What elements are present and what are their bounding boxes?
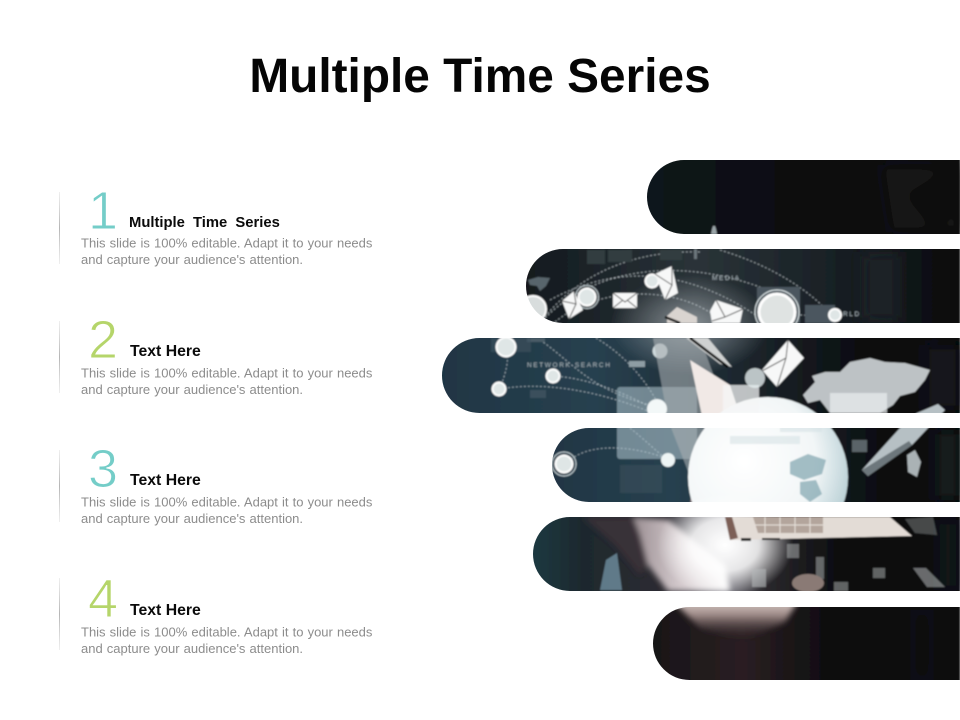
strip 2 network	[527, 249, 860, 323]
number 1: 1	[88, 181, 118, 241]
translucent data panel	[617, 387, 697, 459]
envelopes	[562, 266, 743, 323]
map Australia	[907, 450, 921, 477]
strip 2 network: RLD	[843, 311, 861, 318]
heading 1: Multiple Time Series	[129, 215, 280, 231]
description 1: and capture your audience's attention.	[81, 252, 303, 267]
central soft glow	[615, 278, 759, 370]
list item 4	[59, 569, 373, 656]
data blocks beside globe	[852, 440, 867, 452]
laptop base	[725, 517, 912, 541]
list item 3	[59, 439, 373, 526]
hand	[583, 517, 730, 591]
description 3: and capture your audience's attention.	[81, 511, 303, 526]
list item 2	[59, 310, 373, 397]
description 2: This slide is 100% editable. Adapt it to your needs	[81, 366, 373, 380]
description 3: This slide is 100% editable. Adapt it to your needs	[81, 494, 373, 510]
tablet corner	[667, 307, 697, 323]
tablet device	[862, 404, 945, 476]
laptop screen	[652, 338, 736, 502]
description 4: and capture your audience's attention.	[81, 641, 303, 656]
fingertip	[792, 574, 824, 592]
description 2: and capture your audience's attention.	[81, 382, 303, 397]
heading 4: Text Here	[130, 602, 201, 619]
sleeve highlight	[600, 553, 622, 590]
number 2: 2	[88, 310, 118, 370]
world-media label: MEDIA	[712, 275, 741, 282]
globe	[686, 396, 850, 502]
palm glow in strip 6	[676, 607, 800, 635]
list item 1	[59, 181, 373, 267]
description 4: This slide is 100% editable. Adapt it to your needs	[81, 624, 373, 640]
strip 3 network	[491, 338, 668, 412]
strip 1 figure	[711, 226, 717, 234]
hand glow	[662, 517, 792, 591]
network search label: NETWORK SEARCH	[527, 362, 612, 369]
heading 2: Text Here	[130, 343, 201, 360]
title: Multiple Time Series	[249, 50, 711, 103]
blurred background figure	[862, 165, 960, 680]
envelope large	[762, 340, 804, 387]
floating data marks	[752, 517, 945, 591]
strip backgrounds	[440, 155, 960, 687]
number 3: 3	[88, 439, 118, 499]
description 1: This slide is 100% editable. Adapt it to your needs	[81, 236, 373, 250]
world map	[803, 358, 930, 413]
photo collage in six pill strips	[440, 155, 960, 687]
heading 3: Text Here	[130, 472, 201, 489]
strip 4 network	[552, 428, 665, 493]
number 4: 4	[88, 569, 118, 629]
